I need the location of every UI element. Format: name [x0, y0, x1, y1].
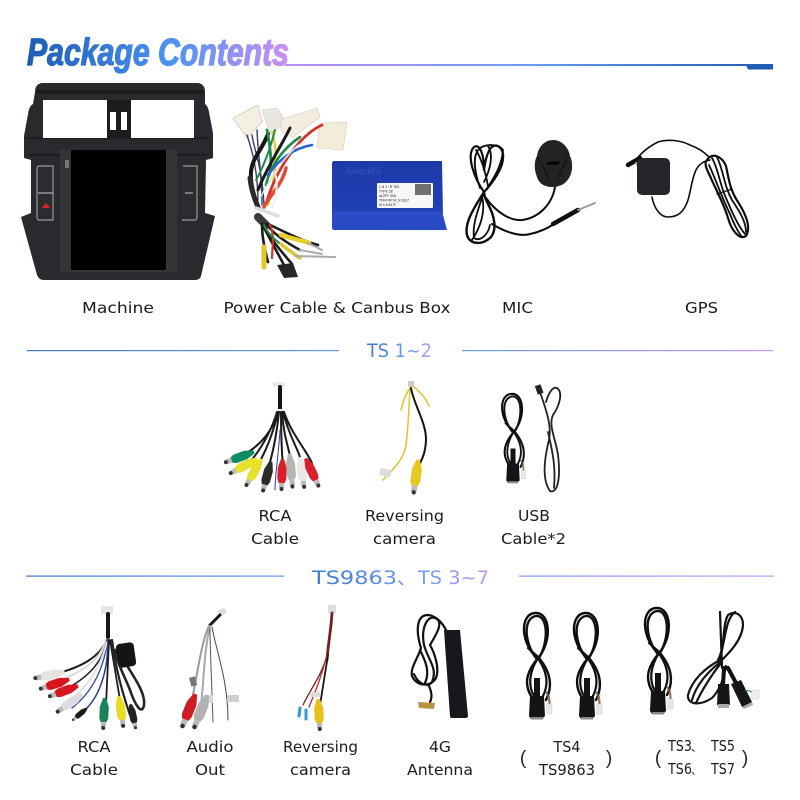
label: USB Cable*2: USB	[518, 507, 550, 525]
label: Machine: Machine	[82, 299, 154, 317]
label: TS4 / TS9863	[520, 738, 612, 779]
image: 4G antenna	[412, 615, 468, 718]
label sticker: M 4 8 84 R	[379, 203, 396, 207]
label sticker: TYPE 28	[379, 190, 393, 194]
label: Reversing camera (second group): camera	[290, 761, 351, 779]
label: TS3, TS5, TS6, TS7: 、	[691, 764, 702, 777]
label: Reversing camera (second group): Reversing	[283, 738, 358, 756]
image: USB cables	[502, 384, 560, 491]
label: Reversing camera	[365, 507, 444, 548]
label: Audio Out: Audio	[186, 738, 234, 756]
label: TS3, TS5, TS6, TS7: TS5	[710, 737, 735, 755]
image: microphone	[467, 140, 595, 243]
heading: TS9863, TS 3~7: 、	[397, 567, 416, 589]
label: TS4 / TS9863: (	[520, 748, 527, 769]
heading: TS9863, TS 3~7	[311, 567, 489, 589]
label: Audio Out: Out	[195, 761, 225, 779]
label: Reversing camera (second group)	[283, 738, 358, 779]
label: 4G Antenna: Antenna	[407, 761, 473, 779]
image: RCA cable with inline fuse	[32, 606, 144, 730]
label: Reversing camera: camera	[373, 530, 436, 548]
title rule	[285, 64, 773, 70]
label: RCA Cable (second group): Cable	[70, 761, 118, 779]
label: GPS: GPS	[685, 299, 718, 317]
label sticker: TFK4 6FT4_N 1637	[379, 198, 409, 202]
label: 4G Antenna: 4G	[429, 738, 451, 756]
label: Audio Out	[186, 738, 234, 779]
label: RCA Cable (second group): RCA	[78, 738, 111, 756]
label: USB Cable*2	[501, 507, 566, 548]
heading: TS9863, TS 3~7: TS9863	[311, 567, 397, 589]
label: RCA Cable: RCA	[258, 507, 292, 525]
divider: TS 1~2	[27, 350, 773, 351]
image: canbus box: hiworld's	[346, 166, 381, 176]
label sticker	[377, 183, 433, 208]
label: TS3, TS5, TS6, TS7: TS3	[667, 737, 692, 755]
label: RCA Cable (second group)	[70, 738, 118, 779]
image: power cable harness	[233, 105, 347, 278]
title: Package Contents	[27, 32, 289, 74]
GPS puck	[637, 158, 670, 195]
image: audio out cable	[177, 608, 239, 731]
label: TS4 / TS9863: TS9863	[538, 761, 595, 779]
image: reversing camera cable	[379, 381, 429, 495]
label: TS3, TS5, TS6, TS7: 、	[691, 741, 702, 754]
image: reversing camera cable (second group)	[299, 605, 336, 731]
label: TS3, TS5, TS6, TS7: TS6	[667, 760, 692, 778]
label: TS4 / TS9863: )	[606, 748, 612, 769]
image: machine head unit	[21, 83, 215, 280]
image: canbus box	[332, 161, 447, 230]
image: RCA cable	[222, 382, 323, 494]
label: USB Cable*2: Cable*2	[501, 530, 566, 548]
label: Reversing camera: Reversing	[365, 507, 444, 525]
label: TS3, TS5, TS6, TS7: )	[742, 748, 748, 769]
label: TS4 / TS9863: TS4	[553, 738, 580, 756]
image: USB cables TS4 / TS9863	[524, 613, 602, 720]
image: GPS antenna	[628, 140, 748, 237]
label: RCA Cable	[251, 507, 299, 548]
label: TS3, TS5, TS6, TS7: TS7	[710, 760, 735, 778]
image: USB cables TS3 / TS5 / TS6 / TS7	[645, 608, 759, 714]
label: TS3, TS5, TS6, TS7: (	[655, 748, 662, 769]
mic puck	[535, 140, 572, 187]
divider: TS9863, TS 3~7	[26, 576, 774, 577]
label: TS3, TS5, TS6, TS7	[655, 737, 748, 778]
label: MIC: MIC	[502, 299, 533, 317]
label sticker: a12PY 30A	[379, 194, 397, 198]
label sticker: L N 1 / R 783	[379, 185, 399, 189]
heading: TS 1~2: TS 1~2	[366, 340, 432, 362]
heading: TS9863, TS 3~7: TS 3~7	[417, 567, 489, 589]
label: RCA Cable: Cable	[251, 530, 299, 548]
label: 4G Antenna	[407, 738, 473, 779]
label: Power Cable & Canbus Box: Power Cable & Canbus Box	[224, 299, 450, 317]
